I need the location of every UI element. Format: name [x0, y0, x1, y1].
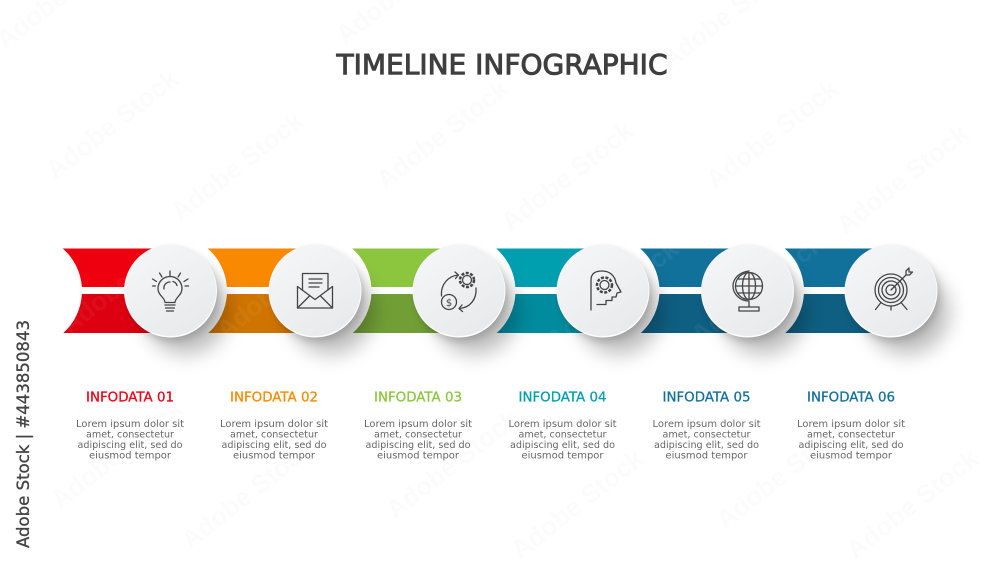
- band 05: [640, 248, 748, 333]
- icon: head with gear: [591, 271, 621, 310]
- body 01: [76, 419, 184, 462]
- body 05: adipiscing elit, sed do: [654, 440, 759, 451]
- body 05: Lorem ipsum dolor sit: [652, 419, 761, 430]
- node 06: target: [844, 244, 938, 338]
- tight circle shadows: [127, 249, 940, 341]
- timeline bands: [63, 248, 891, 333]
- body 03: adipiscing elit, sed do: [366, 440, 471, 451]
- watermark over bands: Adobe Stock: [55, 218, 199, 340]
- band 01: [63, 248, 171, 333]
- icon: lightbulb: [152, 271, 188, 311]
- body 04: adipiscing elit, sed do: [510, 440, 615, 451]
- heading 01: INFODATA 01: [86, 390, 174, 406]
- body 05: eiusmod tempor: [666, 450, 748, 462]
- body 04: [508, 419, 617, 462]
- body 06: eiusmod tempor: [810, 450, 892, 462]
- band 02: [208, 248, 315, 333]
- body 03: amet, consectetur: [374, 430, 462, 440]
- node 05: globe: [701, 244, 794, 338]
- body 06: [797, 419, 905, 462]
- body 05: [652, 419, 761, 462]
- heading 04: INFODATA 04: [518, 390, 606, 406]
- icon: open envelope with letter: [298, 274, 332, 308]
- column 06 text: [797, 390, 905, 462]
- node 01: lightbulb: [124, 244, 217, 338]
- wide soft circle shadows: [144, 270, 949, 354]
- heading 05: INFODATA 05: [662, 390, 750, 406]
- node 02: envelope: [268, 244, 362, 338]
- watermark over bands: Adobe Stock: [210, 223, 354, 345]
- watermark over bands: [55, 218, 829, 355]
- body 06: Lorem ipsum dolor sit: [797, 419, 905, 430]
- stock credit: Adobe Stock | #443850843: [14, 320, 34, 548]
- watermark over bands: Adobe Stock: [685, 228, 829, 350]
- body 01: amet, consectetur: [86, 430, 174, 440]
- column 03 text: [364, 390, 472, 462]
- node 03: money and gear cycle: [412, 244, 506, 338]
- body 03: eiusmod tempor: [377, 450, 459, 462]
- heading 02: INFODATA 02: [230, 390, 318, 406]
- body 02: eiusmod tempor: [233, 450, 315, 462]
- body 02: Lorem ipsum dolor sit: [220, 419, 328, 430]
- body 01: Lorem ipsum dolor sit: [76, 419, 184, 430]
- watermark over bands: Adobe Stock: [540, 233, 684, 355]
- band 03: [352, 248, 459, 333]
- body 01: adipiscing elit, sed do: [78, 440, 183, 451]
- heading 06: INFODATA 06: [807, 390, 895, 406]
- column 02 text: [220, 390, 328, 462]
- band 06: [785, 248, 891, 333]
- body 02: amet, consectetur: [230, 430, 318, 440]
- body 03: [364, 419, 472, 462]
- icon: gear, dollar coin, cycle arrows: [441, 272, 476, 312]
- body 01: eiusmod tempor: [89, 450, 171, 462]
- dollar sign: $: [446, 298, 452, 309]
- body 03: Lorem ipsum dolor sit: [364, 419, 472, 430]
- body 06: adipiscing elit, sed do: [798, 440, 904, 451]
- icon: target with arrow: [875, 268, 912, 310]
- column 04 text: [508, 390, 617, 462]
- body 05: amet, consectetur: [662, 430, 751, 440]
- column 01 text: [76, 390, 184, 462]
- body 02: adipiscing elit, sed do: [222, 440, 327, 451]
- title: TIMELINE INFOGRAPHIC: [335, 48, 668, 81]
- column 05 text: [652, 390, 761, 462]
- body 04: Lorem ipsum dolor sit: [508, 419, 617, 430]
- body 04: eiusmod tempor: [522, 450, 604, 462]
- icon: desk globe: [733, 271, 762, 311]
- body 04: amet, consectetur: [518, 430, 607, 440]
- heading 03: INFODATA 03: [374, 390, 462, 406]
- body 02: [220, 419, 328, 462]
- node 04: head with gear: [556, 244, 650, 338]
- body 06: amet, consectetur: [807, 430, 895, 440]
- band 04: [496, 248, 603, 333]
